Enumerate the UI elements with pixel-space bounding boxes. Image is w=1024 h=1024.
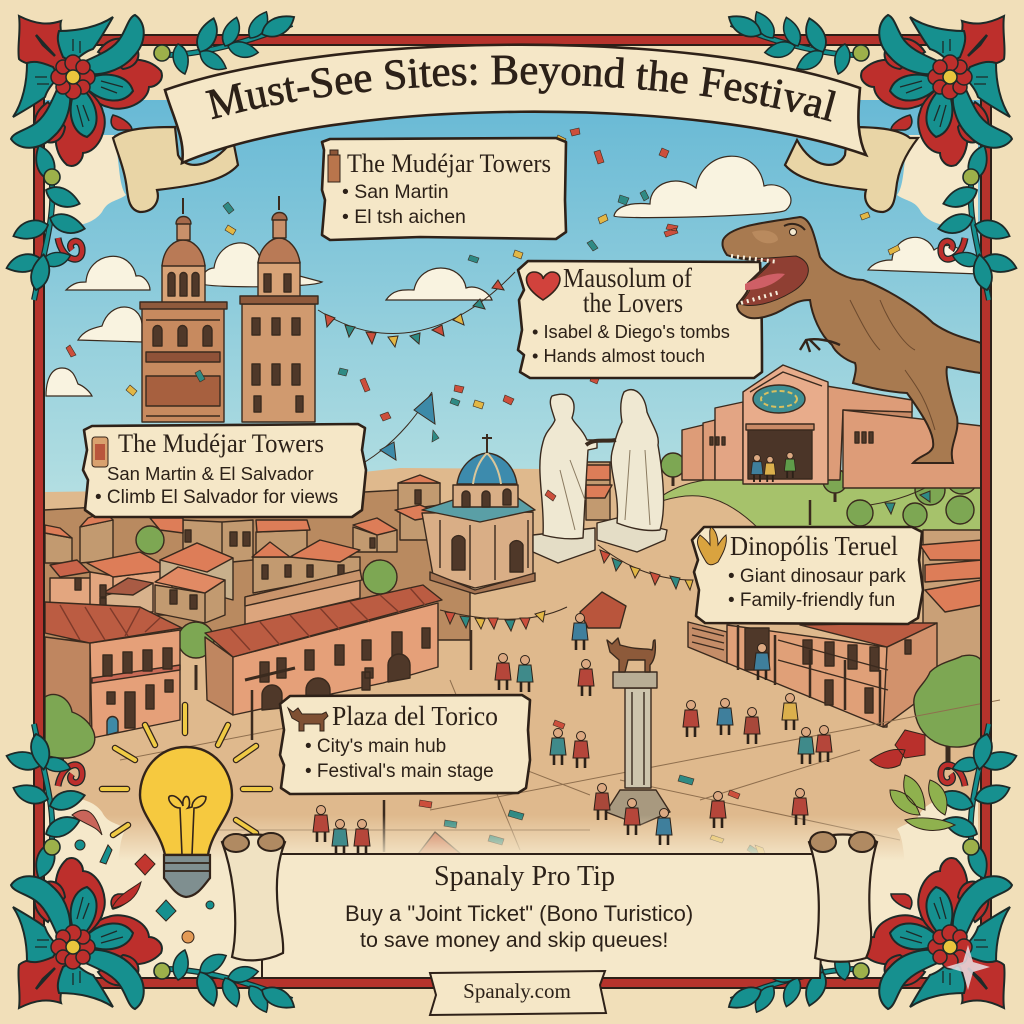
pro tip scroll: Spanaly Pro Tip: [434, 861, 615, 892]
ground: [44, 468, 982, 860]
town: long building center-left: [205, 585, 442, 715]
callout: Mausoleum of the Lovers: • Hands almost touch: [532, 345, 705, 366]
sky: [44, 100, 982, 500]
flower sprig right: [870, 730, 955, 830]
pro tip scroll: Buy a "Joint Ticket" (Bono Turistico): [345, 901, 693, 926]
icon: jar tower: [92, 437, 108, 467]
pedestal right: [597, 518, 667, 552]
icon: bull: [288, 708, 328, 731]
background trees: [136, 526, 397, 690]
callout: Mausoleum of the Lovers: [518, 261, 762, 378]
town: front building left: [45, 602, 182, 738]
title: Must-See Sites: Beyond the Festival: [205, 56, 836, 122]
market tent and lamp posts: [252, 500, 810, 858]
hillside: [650, 450, 982, 560]
statue left: [540, 394, 597, 539]
callout: Dinopolis: Dinopólis Teruel: [730, 531, 898, 561]
torico column: [606, 638, 670, 825]
callout: Mudejar Towers top: • San Martin: [342, 181, 449, 203]
callout: Mausoleum of the Lovers: • Isabel & Diego's tombs: [532, 321, 730, 342]
tree bottom left: [45, 694, 95, 775]
footer site label: Spanaly.com: [463, 979, 571, 1003]
callout: Mausoleum of the Lovers: the Lovers: [583, 288, 683, 318]
callout: Plaza del Torico: • Festival's main stage: [305, 761, 494, 782]
confetti: [66, 128, 919, 858]
watermark star: [946, 945, 990, 990]
back row houses: [45, 483, 440, 563]
callout: Mudejar Towers top: The Mudéjar Towers: [347, 149, 551, 178]
icon: lightbulb: [102, 705, 270, 897]
callout: Mudejar Towers lower: The Mudéjar Towers: [118, 428, 324, 458]
visitors at Dinopolis entrance: [751, 452, 796, 482]
Dinopolis building: [682, 365, 982, 488]
plaza paving: [120, 680, 1000, 850]
statue right: [611, 390, 664, 531]
icon: footprint: [697, 527, 726, 565]
tower: El Salvador: [240, 196, 318, 422]
title bunting top: [318, 272, 515, 347]
title ribbon: [112, 43, 920, 214]
town: back rooftops left: [44, 475, 470, 640]
distant houses behind statues: [586, 462, 612, 520]
callout: Mudejar Towers top: [322, 138, 566, 240]
corner: top-right: [725, 9, 1017, 300]
pro tip scroll: to save money and skip queues!: [360, 928, 668, 952]
icon: tower: [328, 150, 340, 182]
towers: [140, 196, 318, 422]
callout: Plaza del Torico: Plaza del Torico: [332, 701, 498, 731]
callout: Mudejar Towers lower: • Climb El Salvador for views: [95, 487, 338, 508]
people: [313, 614, 832, 856]
callout: Mudejar Towers lower: San Martin & El Salvador: [107, 463, 314, 484]
tower: San Martin: [140, 198, 227, 422]
pedestal left: [533, 528, 595, 563]
corner: top-left: [6, 9, 298, 300]
town centre building: [253, 557, 360, 593]
corner: bottom-right: [725, 724, 1017, 1015]
callout: Dinopolis: • Family-friendly fun: [728, 590, 895, 611]
ribbon body: [165, 45, 866, 163]
corner: bottom-left: [6, 724, 298, 1015]
small ornaments near bulb: [72, 810, 214, 943]
bull: [607, 638, 655, 672]
callout: Mausoleum of the Lovers: Mausolum of: [563, 263, 692, 293]
callout: Plaza del Torico: [280, 695, 530, 794]
callout: Mudejar Towers top: • El tsh aichen: [342, 206, 466, 228]
T-rex: [722, 217, 981, 463]
scroll left roll: [222, 833, 285, 960]
bottom fade to parchment: [45, 815, 981, 861]
callout: Plaza del Torico: • City's main hub: [305, 736, 446, 757]
upper wall: [245, 570, 360, 625]
icon: heart: [526, 272, 560, 300]
scroll right roll: [809, 832, 877, 962]
hill trees: [661, 453, 978, 527]
callout: Mudejar Towers lower: [83, 424, 366, 517]
scroll body: [262, 854, 825, 978]
tree right: [914, 655, 981, 770]
bunting on plaza: [365, 392, 950, 631]
pro tip scroll: [222, 832, 877, 978]
statues of the lovers: [533, 390, 667, 563]
clouds: [46, 156, 980, 396]
callout: Dinopolis: [692, 527, 923, 624]
ribbon tail left: [113, 127, 238, 212]
town: right buildings: [688, 530, 982, 727]
callout: Dinopolis: • Giant dinosaur park: [728, 566, 906, 587]
dome building: [422, 434, 535, 594]
footer site label: [430, 971, 606, 1015]
ribbon tail right: [785, 127, 918, 212]
